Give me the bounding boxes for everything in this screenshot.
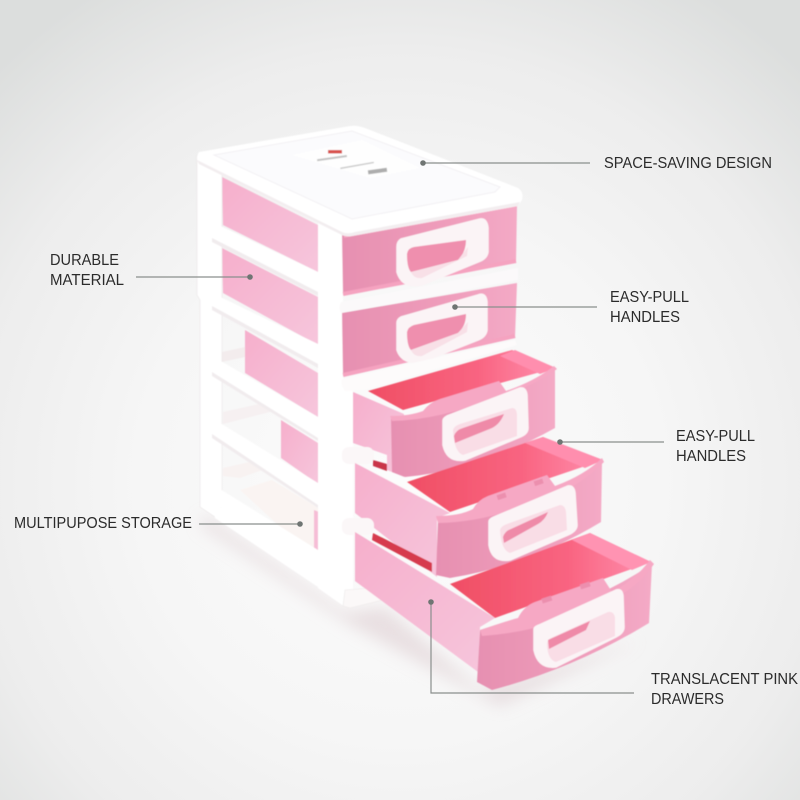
shadow under product <box>200 515 640 706</box>
callout: multipurpose storage: MULTIPUPOSE STORAGE <box>14 515 192 532</box>
foot <box>343 588 383 608</box>
handle 4 <box>489 486 577 560</box>
callout: durable material: MATERIAL <box>50 272 124 289</box>
callout: translucent pink drawers <box>428 599 799 708</box>
callout: easy-pull handles lower <box>557 428 755 465</box>
callout: durable material: DURABLE <box>50 252 119 269</box>
frame: white posts and rails <box>197 155 383 608</box>
lid sticker <box>292 140 420 178</box>
callout: space-saving design <box>420 155 772 172</box>
drawer 5 open <box>355 532 654 690</box>
drawer 2 closed <box>342 283 517 376</box>
product: drawer organizer <box>197 126 654 690</box>
frame knob 4 <box>342 518 374 535</box>
handle 2 <box>397 294 487 362</box>
frame: side panels translucent pink <box>222 177 319 552</box>
front post <box>318 222 353 607</box>
left post <box>197 155 222 517</box>
frame lip under drawer 2 <box>341 340 517 391</box>
lid <box>197 126 522 236</box>
drawer 1 closed <box>342 205 517 295</box>
rails <box>212 222 318 292</box>
callout: translucent pink drawers: DRAWERS <box>651 691 724 708</box>
band between drawers <box>340 268 518 313</box>
frame knob 3 <box>342 447 374 464</box>
callout: easy-pull handles upper: EASY-PULL <box>610 289 689 306</box>
callout: space-saving design: SPACE-SAVING DESIGN <box>604 155 772 172</box>
drawer 3 open <box>353 350 557 477</box>
callout: easy-pull handles lower: EASY-PULL <box>676 428 755 445</box>
drawer 4 open <box>355 437 604 578</box>
callout: easy-pull handles upper <box>452 289 689 326</box>
callout: durable material <box>50 252 253 289</box>
handle 3 <box>443 388 528 460</box>
handle 5 <box>534 590 624 667</box>
handle 1 <box>397 219 488 286</box>
callout: easy-pull handles upper: HANDLES <box>610 309 680 326</box>
callout: multipurpose storage <box>14 515 303 532</box>
frame: back rails and floor <box>222 347 318 552</box>
callout: easy-pull handles lower: HANDLES <box>676 448 746 465</box>
